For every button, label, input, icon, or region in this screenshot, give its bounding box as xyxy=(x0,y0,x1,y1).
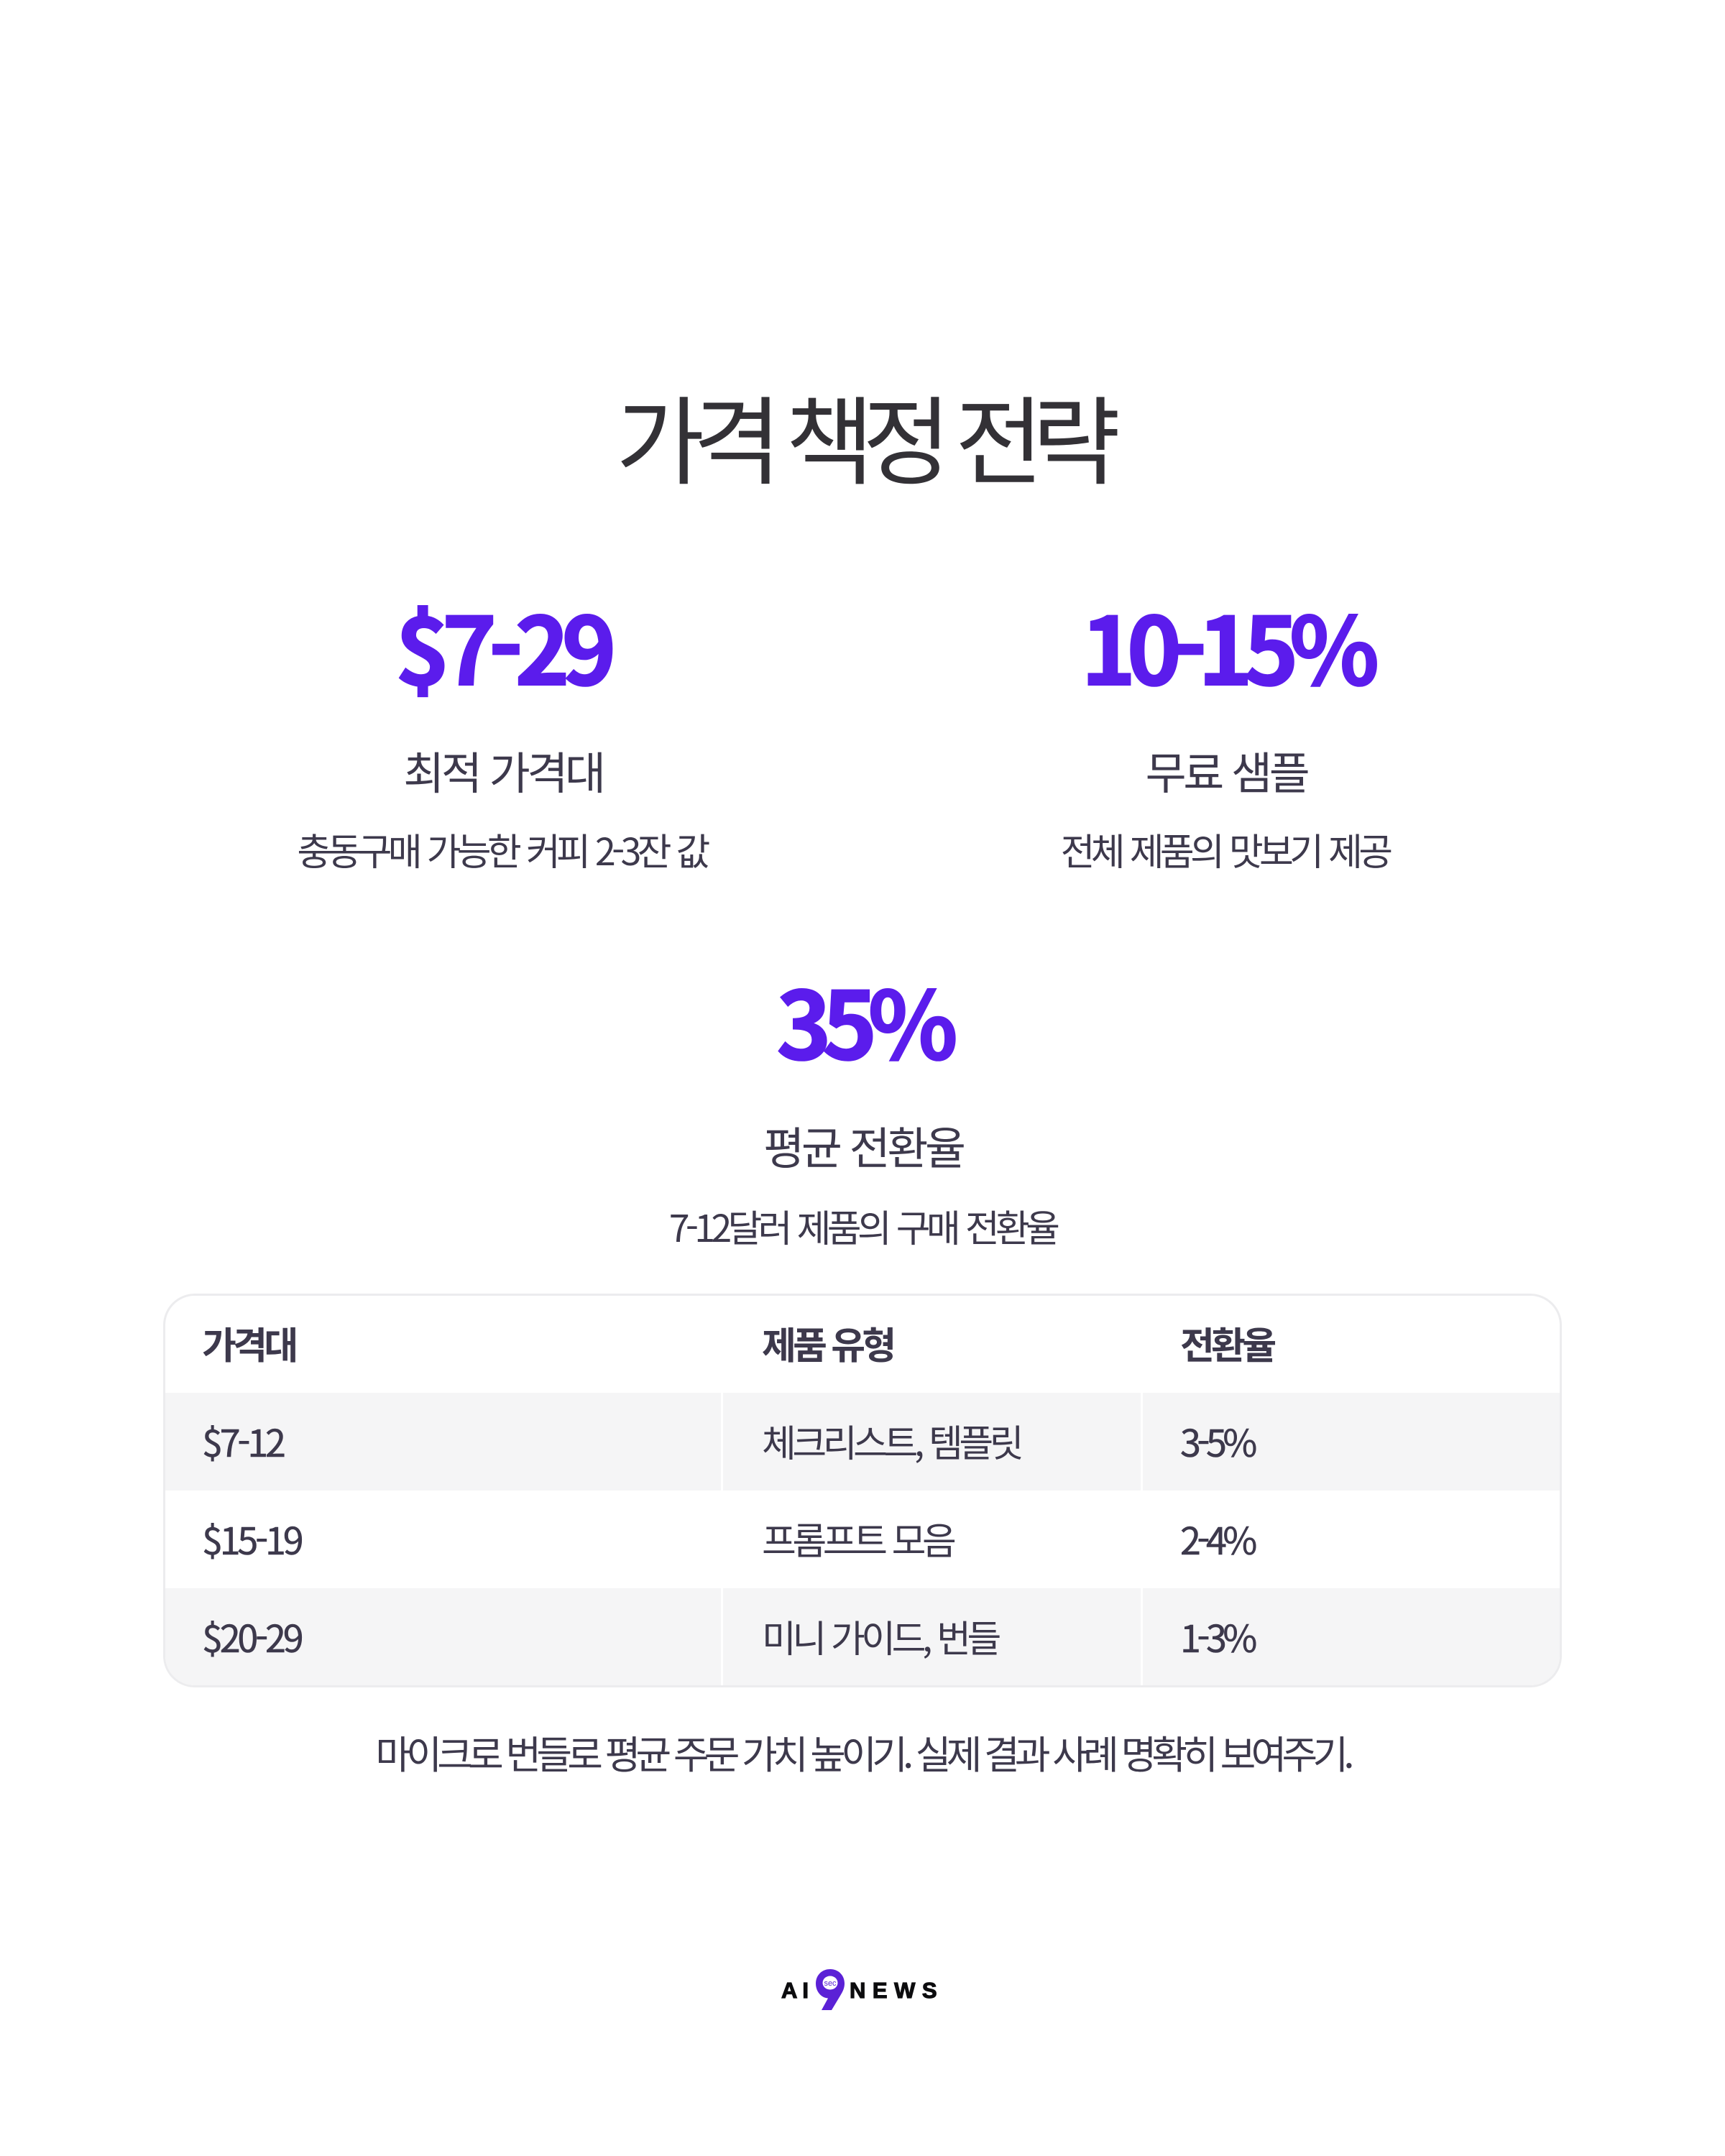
table header xyxy=(202,1316,1275,1370)
table row 1: 3-5% xyxy=(1180,1414,1254,1468)
stat label: 최적 가격대 xyxy=(403,737,603,802)
table row 3: $20-29 xyxy=(202,1609,300,1663)
icon: purple nine: sec xyxy=(824,1979,837,1988)
pricing table xyxy=(163,1294,1562,1687)
stat: free sample xyxy=(1061,577,1392,876)
header: conversion rate: 전환율 xyxy=(1180,1316,1273,1370)
table row 3: 미니 가이드, 번들 xyxy=(762,1609,998,1663)
table row 3 xyxy=(165,1588,1560,1686)
table row 3: 1-3% xyxy=(1180,1609,1254,1663)
stat: average conversion xyxy=(669,952,1058,1253)
table row 1: $7-12 xyxy=(202,1414,283,1468)
title: 가격 책정 전략 xyxy=(616,365,1109,505)
logo xyxy=(781,1969,944,2010)
stat value: 35% xyxy=(776,952,949,1087)
icon: purple nine xyxy=(816,1969,845,2010)
stat description: 충동구매 가능한 커피 2-3잔 값 xyxy=(297,822,707,876)
stat description: 전체 제품의 맛보기 제공 xyxy=(1061,822,1389,876)
table row 1 xyxy=(165,1393,1560,1491)
table row 2 xyxy=(165,1491,1560,1588)
table row 1: 체크리스트, 템플릿 xyxy=(762,1414,1020,1468)
logo text: AI: AI xyxy=(781,1978,814,2003)
table row 2: 프롬프트 모음 xyxy=(762,1511,952,1565)
footer note: 마이크로 번들로 평균 주문 가치 높이기. 실제 결과 사례 명확히 보여주기. xyxy=(375,1723,1350,1780)
stat label: 평균 전환율 xyxy=(763,1112,963,1177)
table row 2: $15-19 xyxy=(202,1511,300,1565)
stat label: 무료 샘플 xyxy=(1146,737,1307,802)
logo text: NEWS: NEWS xyxy=(850,1978,944,2003)
header: price range: 가격대 xyxy=(202,1316,295,1370)
stat value: 10-15% xyxy=(1081,577,1370,712)
header: product type: 제품 유형 xyxy=(762,1316,893,1370)
table row 2: 2-4% xyxy=(1180,1511,1254,1565)
stat description: 7-12달러 제품의 구매 전환율 xyxy=(669,1199,1056,1253)
stat value: $7-29 xyxy=(395,577,608,712)
stat: price range xyxy=(297,577,709,876)
